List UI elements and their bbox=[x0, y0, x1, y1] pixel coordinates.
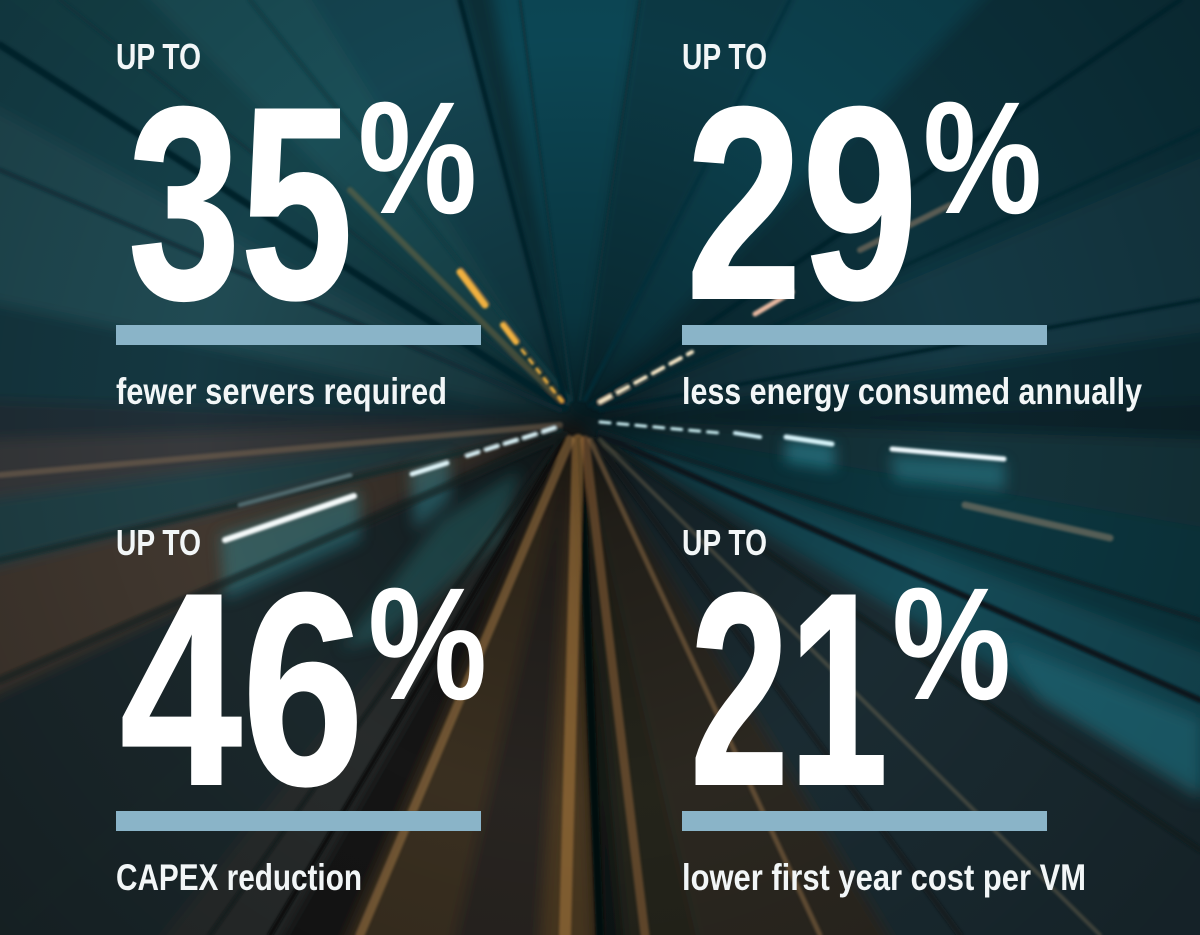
heading: up to: UP TO bbox=[116, 36, 201, 77]
heading: up to: UP TO bbox=[116, 522, 201, 563]
stat panel: 21% lower first year cost bbox=[682, 522, 1086, 898]
divider bar bbox=[116, 325, 481, 345]
label: lower first year cost per VM bbox=[682, 857, 1086, 898]
percent sign: % bbox=[892, 554, 1011, 733]
number: 46: 46 bbox=[120, 537, 364, 843]
stat panel: 35% fewer servers bbox=[116, 36, 481, 412]
heading: up to: UP TO bbox=[682, 522, 767, 563]
divider bar bbox=[682, 811, 1047, 831]
percent sign: % bbox=[923, 68, 1042, 247]
number: 29: 29 bbox=[686, 51, 918, 357]
divider bar bbox=[682, 325, 1047, 345]
teal carriage windows bbox=[220, 440, 1200, 800]
percent sign: % bbox=[368, 554, 487, 733]
stat panel: 46% capex reduction bbox=[116, 522, 487, 898]
number: 35: 35 bbox=[128, 51, 353, 357]
divider bar bbox=[116, 811, 481, 831]
label: fewer servers required bbox=[116, 371, 447, 412]
stat panel: 29% less energy bbox=[682, 36, 1142, 412]
number: 21: 21 bbox=[690, 537, 888, 843]
percent sign: % bbox=[358, 68, 477, 247]
heading: up to: UP TO bbox=[682, 36, 767, 77]
label: CAPEX reduction bbox=[116, 857, 362, 898]
